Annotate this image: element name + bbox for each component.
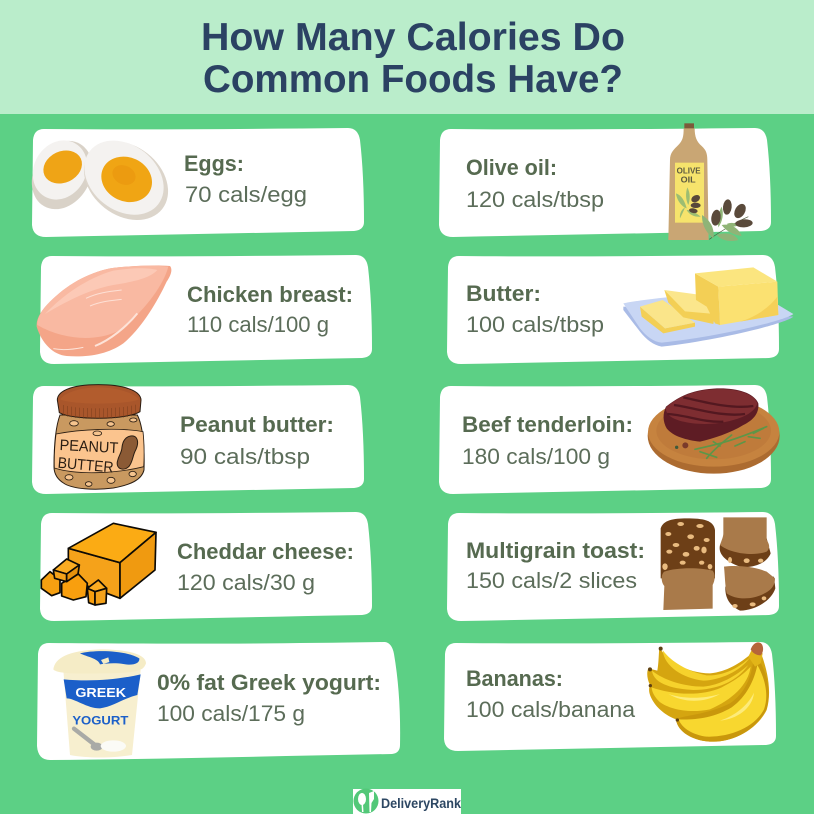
value: beef tenderloin: 180 cals/100 g [462, 444, 610, 469]
icon: steak on board [648, 388, 780, 474]
icon: olive oil bottle [668, 123, 753, 241]
label: eggs: Eggs: [184, 151, 244, 176]
yogurt lettering: GREEK [75, 686, 127, 700]
value: multigrain toast: 150 cals/2 slices [466, 568, 637, 593]
label: beef tenderloin: Beef tenderloin: [462, 412, 633, 437]
bottle label text: OLIVE [677, 166, 701, 175]
bottle label text: OIL [681, 176, 696, 185]
icon: chicken breast [37, 266, 171, 356]
value: cheddar cheese: 120 cals/30 g [177, 570, 315, 595]
label: bananas: Bananas: [466, 666, 563, 691]
panel: olive oil [439, 123, 771, 241]
label: cheddar cheese: Cheddar cheese: [177, 539, 354, 564]
icon: greek yogurt [53, 649, 146, 757]
icon: multigrain bread [661, 517, 775, 611]
value: peanut butter: 90 cals/tbsp [180, 444, 310, 469]
panel: beef tenderloin [439, 385, 780, 494]
value: eggs: 70 cals/egg [185, 182, 307, 207]
title: How Many Calories Do [201, 16, 625, 59]
title: Common Foods Have? [203, 58, 623, 101]
label: greek yogurt: 0% fat Greek yogurt: [157, 670, 381, 695]
value: butter: 100 cals/tbsp [466, 312, 604, 337]
logo: DeliveryRank: DeliveryRank [381, 795, 461, 811]
value: chicken breast: 110 cals/100 g [187, 312, 329, 337]
panel: eggs [20, 125, 364, 237]
panel: butter [447, 255, 793, 364]
jar label text: PEANUT [59, 437, 119, 457]
panel: peanut butter [32, 385, 364, 494]
icon: peanut butter jar [54, 385, 144, 489]
icon: butter on dish [623, 267, 793, 347]
logo: DeliveryRank [353, 788, 461, 814]
jar label text: BUTTER [57, 455, 114, 477]
panel: greek yogurt [37, 642, 400, 760]
value: greek yogurt: 100 cals/175 g [157, 701, 305, 726]
bottle label text [677, 166, 701, 185]
yogurt lettering: YOGURT [72, 713, 129, 727]
label: chicken breast: Chicken breast: [187, 282, 353, 307]
yogurt lettering [72, 686, 129, 727]
panel: cheddar cheese [40, 512, 372, 621]
icon: bananas [647, 642, 769, 742]
icon: cheddar cheese [41, 523, 156, 605]
panel: multigrain toast [447, 512, 779, 621]
label: butter: Butter: [466, 281, 541, 306]
icon: eggs [20, 125, 184, 236]
label: peanut butter: Peanut butter: [180, 412, 334, 437]
jar label text [57, 437, 119, 477]
label: multigrain toast: Multigrain toast: [466, 538, 645, 563]
value: olive oil: 120 cals/tbsp [466, 187, 604, 212]
title [201, 16, 625, 101]
header band [0, 0, 814, 114]
value: bananas: 100 cals/banana [466, 697, 635, 722]
panel: chicken breast [37, 255, 372, 364]
label: olive oil: Olive oil: [466, 155, 557, 180]
panel: bananas [444, 642, 776, 751]
